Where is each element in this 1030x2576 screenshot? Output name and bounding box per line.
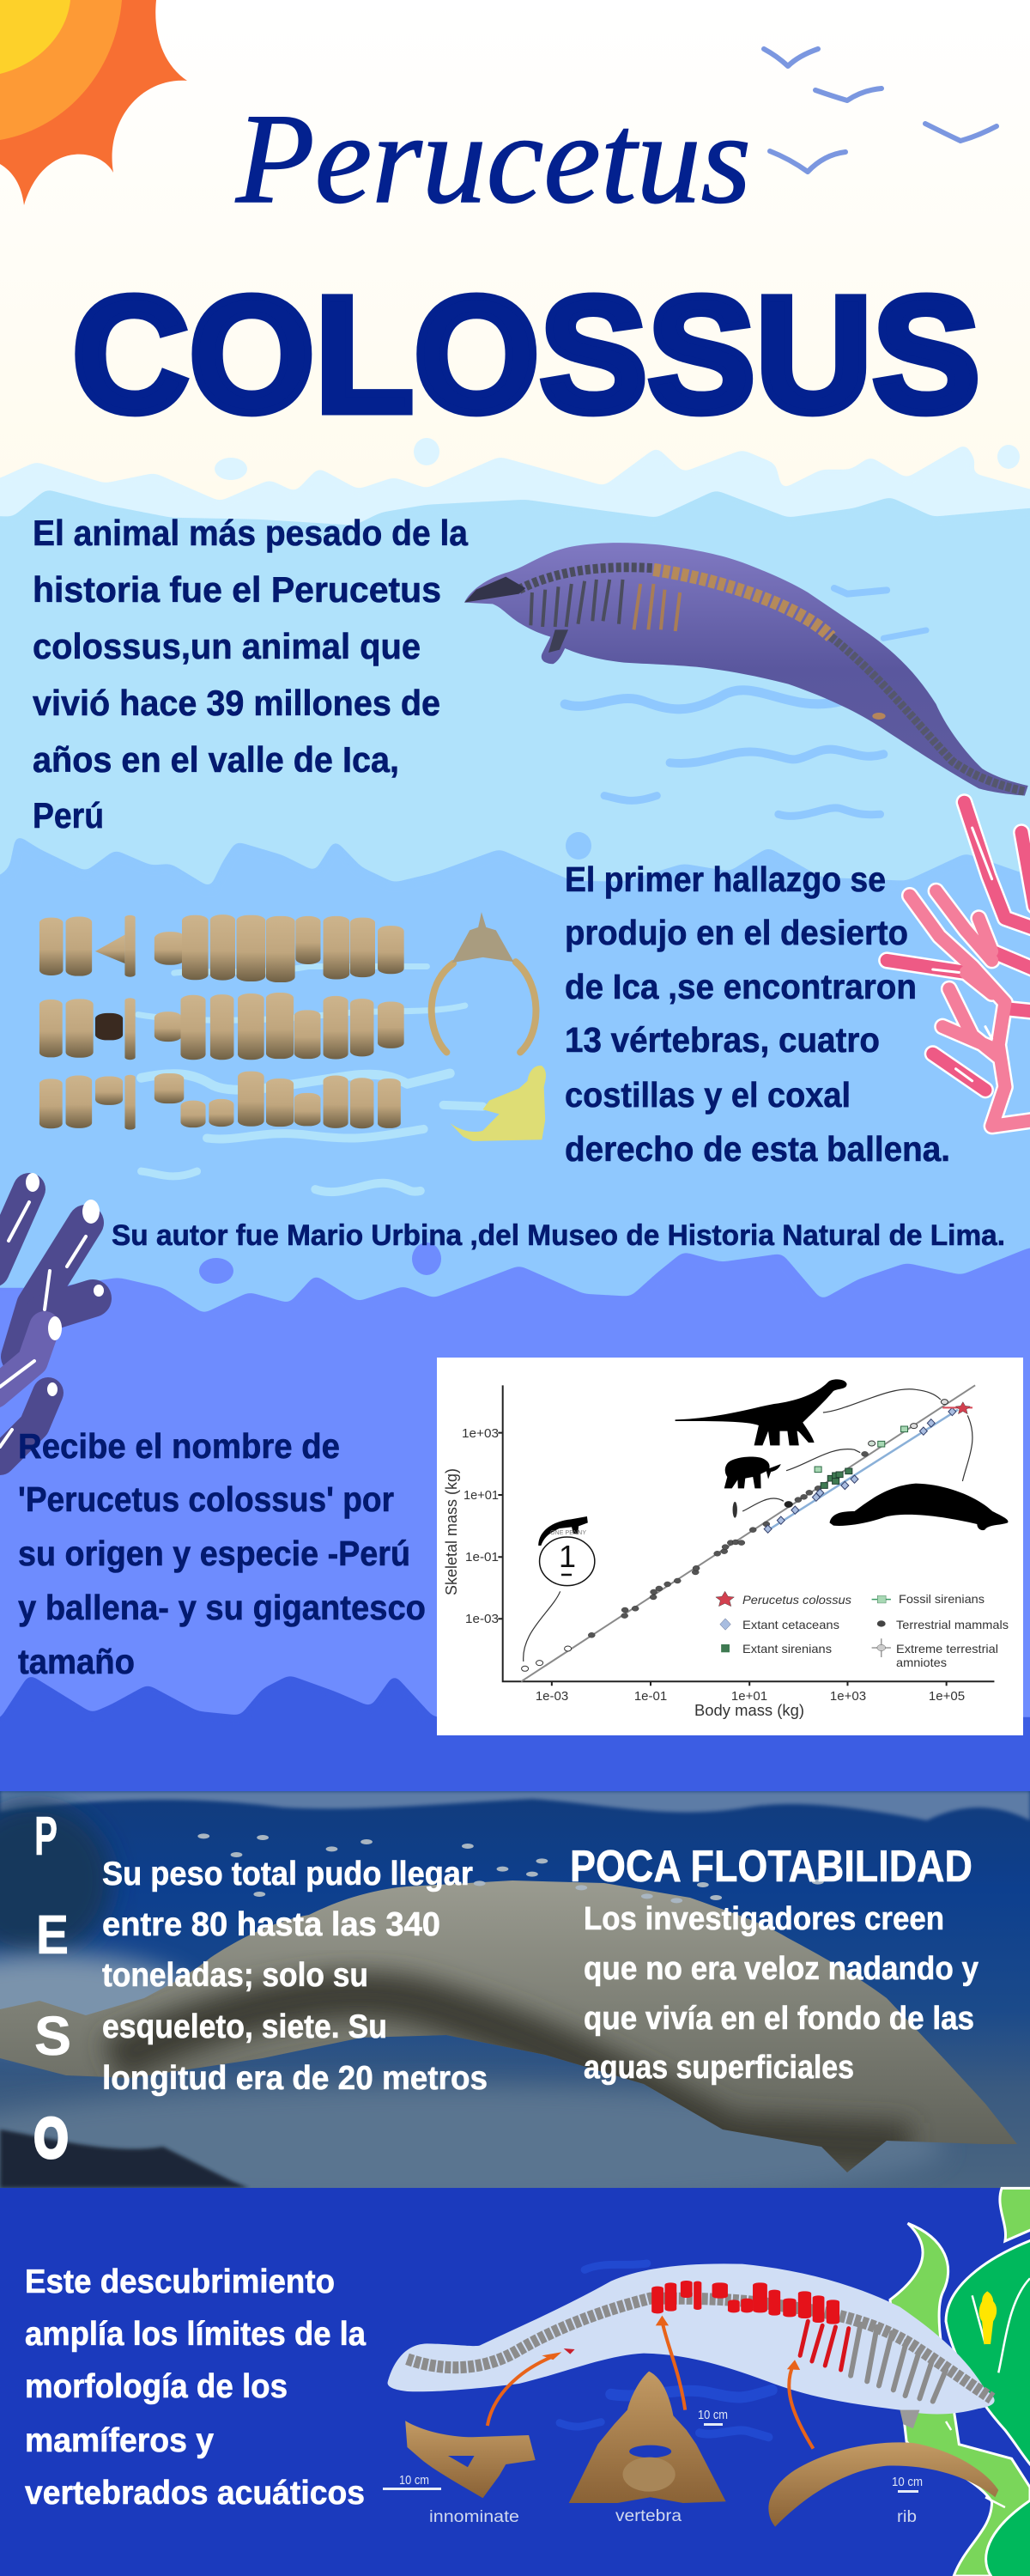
illustration: skeleton diagram [388,2263,998,2527]
text: buoyancy paragraph: que no era veloz nadando y [584,1951,978,1987]
whale spine: tail section [831,637,1025,792]
annotation arrows [524,1389,972,1662]
x tick labels [536,1689,965,1704]
silhouette: sauropod [676,1379,847,1445]
text: scale labels: 10 cm [698,2408,728,2422]
y tick labels: 1e-03 [465,1612,499,1626]
y tick labels [462,1426,499,1626]
heading: PESO vertical: E [36,1904,69,1965]
illustration: whale with skeleton [464,543,1028,796]
text: intro paragraph: años en el valle de Ica, [33,739,399,780]
text: weight paragraph: Su peso total pudo llegar [102,1856,473,1893]
y axis title: Skeletal mass (kg) [443,1468,460,1595]
x tick labels: 1e-01 [634,1689,667,1704]
coral dark pink branches [887,802,1030,1090]
text: first discovery paragraph: derecho de esta ballena. [565,1129,950,1169]
text: buoyancy paragraph: Los investigadores creen [584,1901,944,1937]
text: intro paragraph: Perú [33,795,104,835]
photo: dark left water [0,1803,112,1958]
whale belly shadow [112,1996,910,2147]
text: bone labels [429,2507,917,2526]
text: weight paragraph: entre 80 hasta las 340 [102,1906,440,1943]
x tick labels: 1e+03 [830,1689,866,1704]
text: bone labels: vertebra [615,2507,682,2525]
heading: PESO vertical [34,1805,71,2169]
coral light branch [0,1327,45,1393]
text: intro paragraph: historia fue el Perucetus [33,569,441,610]
legend: Extant sirenians [742,1642,832,1656]
illustration: seaweed [890,2188,1030,2576]
text: buoyancy paragraph [584,1901,978,2086]
data points: terrestrial mammals [588,1451,869,1637]
whale pelvis [872,713,886,720]
wave layers background [0,438,1030,1820]
text: weight paragraph: esqueleto, siete. Su [102,2008,387,2045]
title: COLOSSUS: COLOSSUS [72,262,980,447]
whale skull [464,577,525,603]
text: name origin paragraph: tamaño [18,1642,135,1681]
text: weight paragraph: longitud era de 20 metros [102,2060,488,2097]
whale spine: orange section [653,569,831,637]
y tick labels: 1e-01 [465,1550,499,1564]
orange arrows [488,2316,813,2449]
data points: extreme amniotes [522,1400,948,1671]
seaweed veins [946,2278,1030,2507]
silhouette: lizard on coin [538,1516,588,1546]
whale flipper bones [548,629,568,653]
coin lettering: ONE PENNY [550,1530,586,1536]
skeleton red vertebrae [651,2281,839,2324]
fossil: rib [768,2442,998,2527]
legend: Extreme terrestrial [896,1642,998,1656]
skeleton red ribs [800,2321,849,2370]
background sky [0,0,1030,618]
text: weight paragraph: toneladas; solo su [102,1957,368,1994]
text: name origin paragraph: su origen y especie -Perú [18,1534,410,1573]
icon: yellow figure [979,2291,997,2344]
panel: underwater whale photo [0,1791,1030,2207]
icon: birds [764,49,997,172]
text: intro paragraph [33,513,469,835]
photo: vertebra and rib arch [432,912,536,1052]
text: conclusion paragraph: Este descubrimiento [25,2263,335,2300]
fossil: vertebra [569,2372,726,2503]
silhouette: sea cow [829,1484,1008,1530]
icon: coin [540,1537,595,1586]
skeleton flipper [900,2410,919,2428]
silhouette: human [733,1502,737,1518]
text: weight paragraph [102,1856,488,2097]
legend markers [716,1591,891,1657]
star marker: Perucetus [942,1402,972,1414]
text: first discovery paragraph: El primer hallazgo se [565,860,886,899]
text: conclusion paragraph [25,2263,366,2512]
photo: whale body [0,1880,1017,2172]
fossil: innominate [405,2421,536,2498]
coral highlights [933,828,992,1081]
text: name origin paragraph: Recibe el nombre de [18,1426,340,1466]
legend [716,1591,1009,1669]
text: scale labels: 10 cm [399,2473,429,2488]
legend: Extant cetaceans [742,1618,839,1631]
y tick labels: 1e+03 [462,1426,499,1441]
legend: amniotes [896,1656,947,1669]
legend: Perucetus colossus [742,1593,851,1607]
skeleton red pelvis [564,2348,575,2354]
legend: Terrestrial mammals [896,1618,1009,1631]
coin numeral: 1 [559,1539,576,1574]
text: conclusion paragraph: mamíferos y [25,2422,214,2459]
icon: sun [0,0,187,205]
text: first discovery paragraph: 13 vértebras, cuatro [565,1020,880,1060]
text: first discovery paragraph: produjo en el desierto [565,913,908,952]
row 2 [39,993,404,1060]
panel: conclusion [0,2188,1030,2576]
text: name origin paragraph [18,1426,426,1681]
small background waves upper [565,588,926,816]
scale bars [383,2423,918,2493]
coral light pink branches [910,891,1030,1126]
whale spine: gray section [519,568,653,590]
seaweed light green [890,2223,1030,2576]
data points: extant cetaceans [764,1407,956,1533]
text: intro paragraph: colossus,un animal que [33,626,421,666]
x axis title: Body mass (kg) [694,1702,804,1719]
text: scale labels [399,2408,923,2489]
text: intro paragraph: El animal más pesado de la [33,513,469,553]
text: first discovery paragraph: costillas y el coxal [565,1075,851,1115]
photo: fossil vertebrae rows [39,914,404,1130]
row 1 [39,914,404,982]
photo: dark rock [0,2129,249,2188]
skeleton gray ribs [851,2324,946,2402]
x tick labels: 1e+05 [929,1689,965,1704]
small background waves bottom [560,2263,772,2437]
text: name origin paragraph: y ballena- y su gigantesco [18,1588,426,1627]
skeleton spine [407,2299,992,2398]
photo: small fish [197,1833,824,1903]
text: conclusion paragraph: vertebrados acuáticos [25,2475,365,2512]
text: first discovery paragraph [565,860,950,1169]
heading: POCA FLOTABILIDAD: POCA FLOTABILIDAD [570,1842,972,1892]
legend: Fossil sirenians [899,1592,985,1606]
text: buoyancy paragraph: aguas superficiales [584,2050,854,2086]
data points: sirenians [821,1468,852,1488]
illustration: pink coral [887,802,1030,1126]
heading: PESO vertical: P [34,1805,58,1867]
coral white outline [887,802,1030,1126]
x tick labels: 1e+01 [731,1689,767,1704]
chart axes [498,1379,1008,1686]
coral dark branches [0,1189,29,1271]
text: author line: Su autor fue Mario Urbina ,del Museo de Historia Natural de Lima. [112,1219,1005,1252]
heading: PESO vertical: O [34,2107,68,2169]
photo: fog left [0,1953,197,2048]
chart: skeletal mass vs body mass [437,1358,1023,1735]
silhouette: elephant [724,1456,781,1488]
x tick labels: 1e-03 [536,1689,568,1704]
text: conclusion paragraph: amplía los límites de la [25,2316,366,2353]
text: bone labels: innominate [429,2508,519,2526]
text: intro paragraph: vivió hace 39 millones de [33,683,440,723]
photo: surface ripples [0,1791,1030,1820]
illustration: purple coral [0,1173,104,1460]
whale ribs [530,580,680,631]
coral highlights [26,1173,104,1396]
text: buoyancy paragraph: que vivía en el fondo de las [584,2001,974,2037]
text: name origin paragraph: 'Perucetus colossus' por [18,1479,394,1519]
icon: gold human silhouette [450,1066,546,1141]
seaweed dark green [946,2239,1030,2467]
text: first discovery paragraph: de Ica ,se encontraron [565,967,917,1006]
text: bone labels: rib [897,2508,917,2526]
row 3 [39,1072,401,1130]
y tick labels: 1e+01 [464,1488,499,1503]
small background waves middle [138,966,482,1192]
text: conclusion paragraph: morfología de los [25,2368,288,2405]
heading: PESO vertical: S [34,2005,71,2067]
photo: seabed [0,2087,944,2207]
coin numeral bar [561,1574,572,1576]
trend lines [521,1385,975,1681]
title: Perucetus: Perucetus [235,88,751,230]
text: scale labels: 10 cm [892,2475,923,2489]
